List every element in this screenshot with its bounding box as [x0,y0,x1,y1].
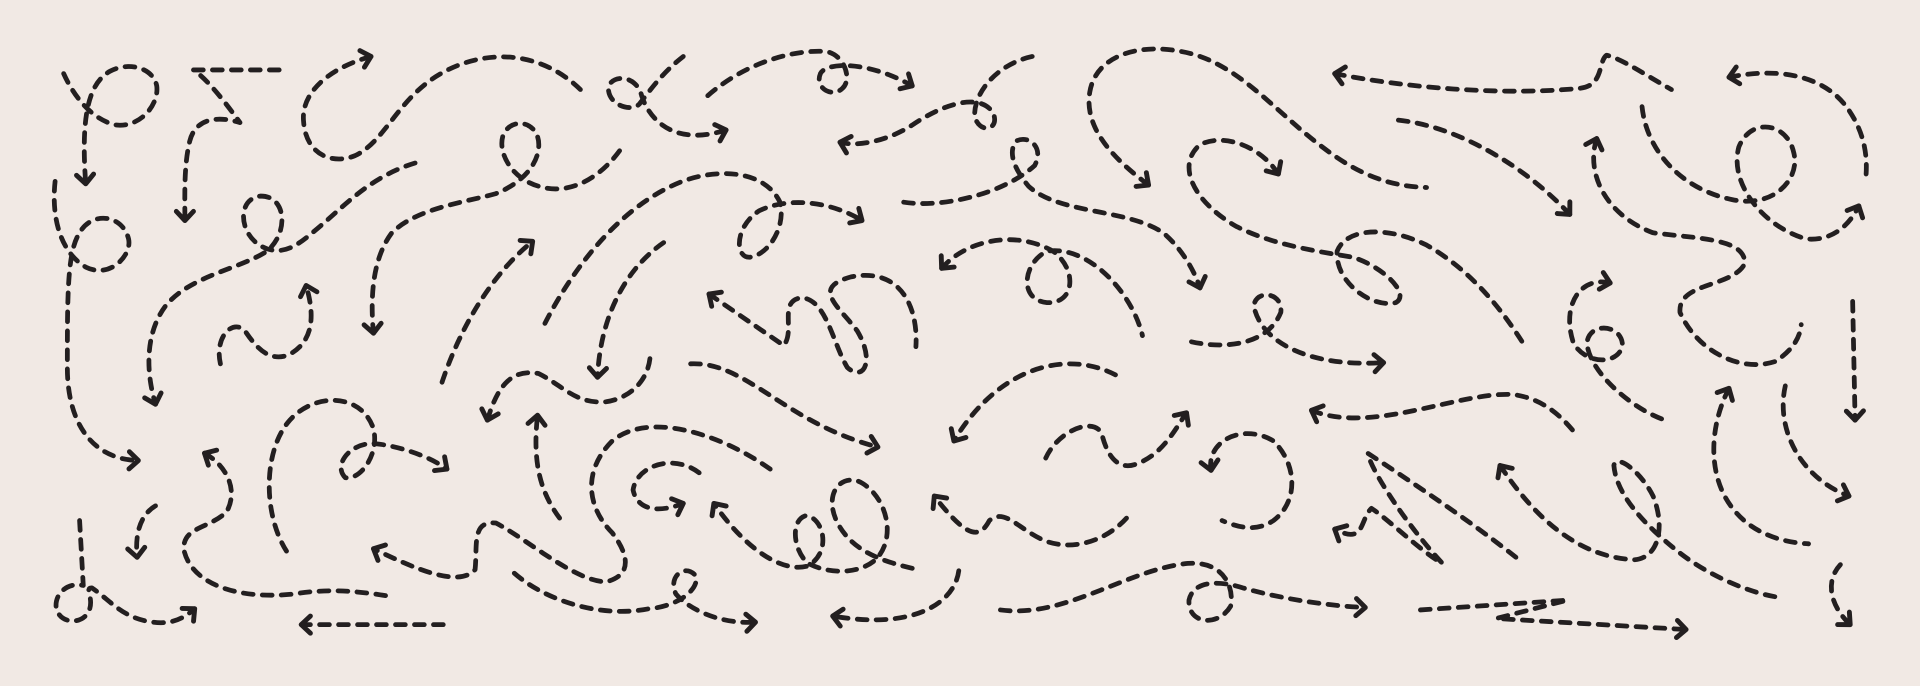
arrow: centre loop down right [904,139,1200,288]
arrow: double loop up-left [714,480,912,571]
arrow: small wave up [219,285,311,364]
arrow: top-left loop [64,67,157,184]
arrow: wave up-left [934,496,1127,545]
arrow: large top wave [1089,49,1427,187]
arrow: bottom-left s curve [184,453,391,596]
arrow: short curve up [536,415,560,518]
arrow: bottom curve left [833,571,959,620]
arrow: right curve up [1714,388,1809,544]
arrow: loop left [840,56,1032,144]
arrow: gentle curve down right [1398,120,1570,214]
arrow: long left with kink [1335,55,1671,91]
arrow: bottom loop right [514,571,756,622]
arrow: bottom wave with loop [1000,563,1365,620]
arrow: straight down [1853,301,1855,420]
arrow: small hook [633,463,699,509]
arrow: arc down-left [954,364,1116,441]
arrow: small wave up right [1046,413,1187,466]
arrow: small right loop [1570,282,1665,420]
arrow: right serpentine [1594,139,1801,365]
arrow: arch with loop right [269,400,447,551]
arrow: long loop down-left [149,163,415,404]
arrow: flat zigzag right [1420,600,1686,630]
arrow: small loop right [608,56,726,135]
arrow: long wave with loop [1189,140,1524,345]
arrow: s-curve right [691,364,878,447]
arrow: arch with loop [942,240,1142,336]
arrow: curve down [598,243,664,377]
arrow: scribble with loops [709,275,916,372]
arrow: top-right arc [1729,73,1866,174]
arrow: straight left [301,623,443,627]
arrow: right loop up [1642,107,1859,239]
arrow: bottom-left loop [56,521,195,623]
arrow: zigzag down [185,70,279,221]
arrow: small curve down [1831,565,1850,625]
arrow: long serpentine left [373,427,770,582]
arrow: sharp zigzag [1335,453,1516,563]
arrow: top loop right [708,51,912,96]
arrow: curve up right [442,241,533,382]
arrow: left side loop [54,181,138,461]
arrow: small loop right [1191,295,1384,363]
arrow: centre-left loop down [372,123,620,333]
arrow: wave left [1311,394,1573,431]
arrow: lower-right loop [1500,462,1782,598]
arrow: long arc with loop [545,174,862,323]
arrow: circular return [1211,434,1292,528]
arrow: wave down-left [487,355,650,420]
arrow: large S curve up [303,56,580,159]
arrow: right curve down [1783,386,1849,496]
arrow: tiny curve down [137,506,156,557]
